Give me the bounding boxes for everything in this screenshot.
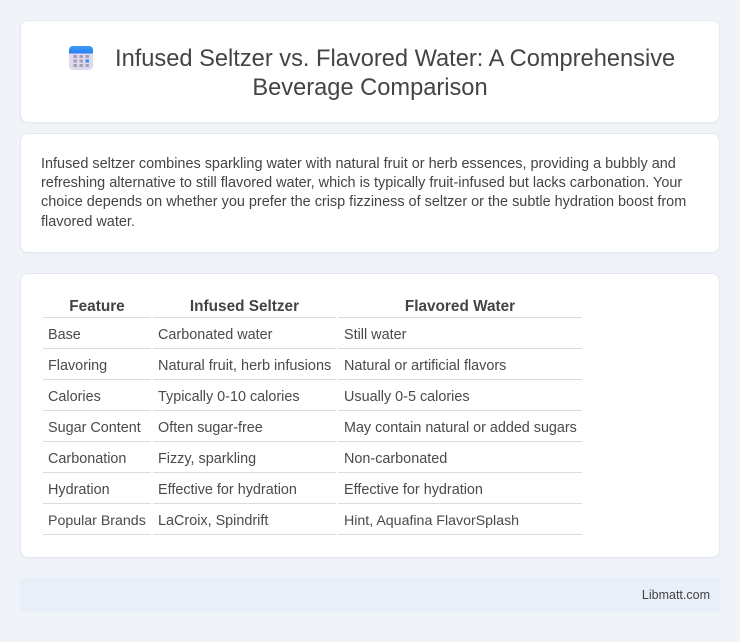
column headers	[69, 298, 515, 315]
title: Infused Seltzer vs. Flavored Water: A Comprehensive	[115, 46, 675, 72]
row: base: Still water	[344, 327, 406, 343]
intro text: refreshing alternative to still flavored water, which is typically fruit-infused but lacks carbonation. Your	[41, 175, 682, 191]
panel: introduction	[20, 133, 720, 253]
row: popular brands: Popular Brands	[48, 513, 146, 529]
row: hydration: Effective for hydration	[158, 482, 297, 498]
row: hydration	[48, 482, 483, 498]
row: flavoring	[48, 358, 506, 374]
row: popular brands: Hint, Aquafina FlavorSplash	[344, 513, 519, 529]
row: hydration: Hydration	[48, 482, 110, 498]
row: sugar content	[48, 420, 577, 436]
icon: calendar grid	[69, 46, 93, 70]
row: base: Carbonated water	[158, 327, 272, 343]
intro text: flavored water.	[41, 214, 135, 230]
title	[115, 46, 675, 101]
footer bar	[20, 578, 720, 612]
row: sugar content: Sugar Content	[48, 420, 141, 436]
row: calories: Typically 0-10 calories	[158, 389, 300, 405]
row: carbonation	[48, 451, 447, 467]
row: carbonation: Carbonation	[48, 451, 126, 467]
intro text: Infused seltzer combines sparkling water with natural fruit or herb essences, providing a bubbly and	[41, 156, 676, 172]
row: carbonation: Non-carbonated	[344, 451, 447, 467]
row: base: Base	[48, 327, 81, 343]
row: popular brands	[48, 513, 519, 529]
panel: title header	[20, 20, 720, 123]
footer credit: Libmatt.com	[642, 588, 710, 602]
comparison table	[43, 298, 582, 535]
row: popular brands: LaCroix, Spindrift	[158, 513, 268, 529]
row: sugar content: Often sugar-free	[158, 420, 263, 436]
row: calories: Usually 0-5 calories	[344, 389, 470, 405]
row: calories: Calories	[48, 389, 101, 405]
row: base	[48, 327, 406, 343]
row: calories	[48, 389, 470, 405]
column headers: Flavored Water	[405, 298, 515, 315]
row: flavoring: Natural fruit, herb infusions	[158, 358, 331, 374]
row: flavoring: Natural or artificial flavors	[344, 358, 506, 374]
column headers: Feature	[69, 298, 125, 315]
intro text	[41, 156, 686, 230]
row: carbonation: Fizzy, sparkling	[158, 451, 256, 467]
intro text: choice depends on whether you prefer the crisp fizziness of seltzer or the subtle hydration boost from	[41, 194, 686, 210]
row: flavoring: Flavoring	[48, 358, 107, 374]
panel: comparison table	[20, 273, 720, 558]
row: hydration: Effective for hydration	[344, 482, 483, 498]
column headers: Infused Seltzer	[190, 298, 299, 315]
row: sugar content: May contain natural or added sugars	[344, 420, 577, 436]
title: Beverage Comparison	[252, 75, 488, 101]
